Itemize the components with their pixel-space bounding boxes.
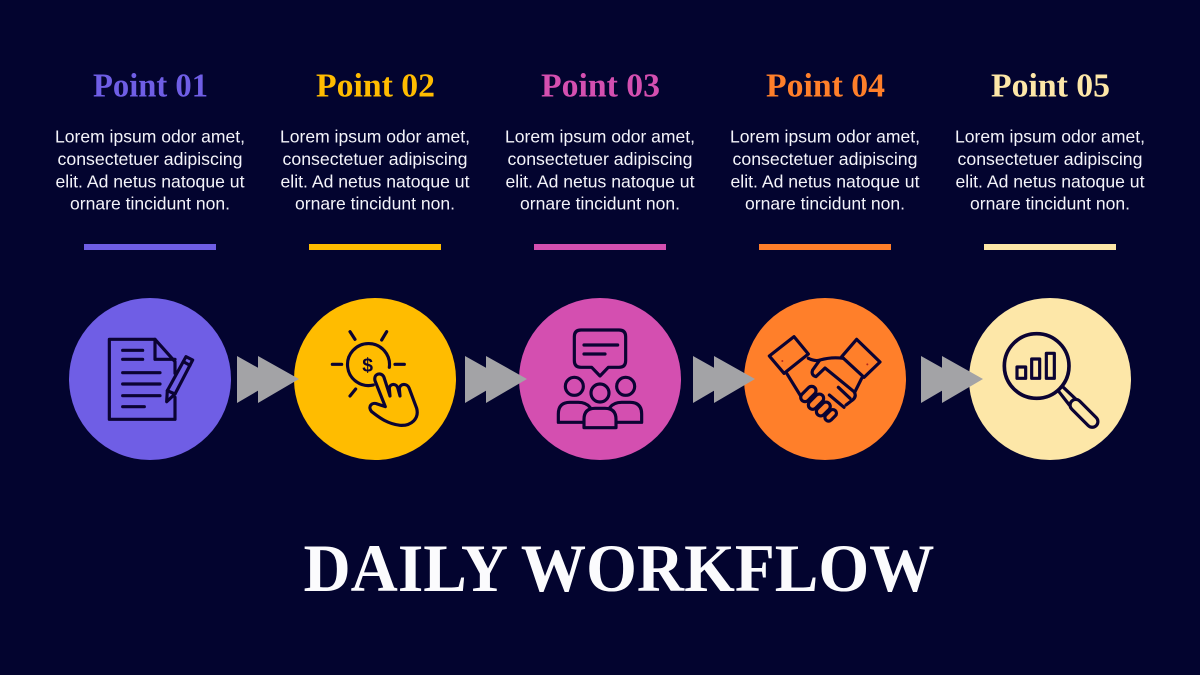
- text block: Point 03 description: consectetuer adipiscing: [508, 149, 692, 169]
- icon: hand clicking dollar coin: [332, 332, 417, 425]
- text block: Point 05 description: elit. Ad netus natoque ut: [956, 172, 1145, 192]
- heading: Point 05: Point 05: [991, 68, 1110, 104]
- circle: Point 05: [969, 298, 1131, 460]
- text block: Point 03 description: elit. Ad netus natoque ut: [506, 172, 695, 192]
- arrow: Point 01 to 02: [237, 356, 299, 403]
- text block: Point 04 description: ornare tincidunt non.: [745, 194, 905, 214]
- text block: Point 01 description: ornare tincidunt non.: [70, 194, 230, 214]
- icon: handshake: [769, 337, 880, 423]
- arrow: Point 02 to 03: [465, 356, 527, 403]
- underline bar: Point 02: [309, 244, 441, 250]
- arrow: Point 03 to 04: [693, 356, 755, 403]
- column: Point 05: [955, 68, 1145, 250]
- text block: Point 02 description: ornare tincidunt non.: [295, 194, 455, 214]
- text block: Point 05 description: consectetuer adipiscing: [958, 149, 1142, 169]
- text block: Point 02 description: consectetuer adipiscing: [282, 149, 468, 169]
- text block: Point 04 description: consectetuer adipiscing: [732, 149, 918, 169]
- text block: Point 01 description: elit. Ad netus natoque ut: [56, 172, 245, 192]
- column: Point 01: [55, 68, 245, 250]
- text block: Point 01 description: consectetuer adipiscing: [58, 149, 242, 169]
- text block: Point 05 description: [955, 126, 1145, 214]
- title: DAILY WORKFLOW: [304, 530, 934, 606]
- heading: Point 01: Point 01: [93, 68, 208, 104]
- text block: Point 01 description: [55, 126, 245, 214]
- icon: document and pencil: [109, 339, 193, 419]
- icon: magnifier over bar chart: [1004, 334, 1100, 430]
- text block: Point 04 description: [730, 126, 920, 214]
- text block: Point 03 description: Lorem ipsum odor amet,: [505, 126, 695, 146]
- text block: Point 04 description: elit. Ad netus natoque ut: [730, 172, 920, 192]
- text block: Point 05 description: ornare tincidunt non.: [970, 194, 1130, 214]
- heading: Point 03: Point 03: [541, 68, 660, 104]
- text block: Point 04 description: Lorem ipsum odor amet,: [730, 126, 920, 146]
- text block: Point 05 description: Lorem ipsum odor amet,: [955, 126, 1145, 146]
- underline bar: Point 03: [534, 244, 666, 250]
- icon: hand clicking dollar coin: $: [362, 355, 373, 376]
- heading: Point 02: Point 02: [316, 68, 435, 104]
- text block: Point 02 description: Lorem ipsum odor amet,: [280, 126, 470, 146]
- arrow: Point 04 to 05: [921, 356, 983, 403]
- column: Point 03: [505, 68, 695, 250]
- underline bar: Point 01: [84, 244, 216, 250]
- text block: Point 01 description: Lorem ipsum odor amet,: [55, 126, 245, 146]
- circle: Point 02: [294, 298, 456, 460]
- heading: Point 04: Point 04: [766, 68, 885, 104]
- text block: Point 03 description: ornare tincidunt non.: [520, 194, 680, 214]
- text block: Point 02 description: [280, 126, 470, 214]
- text block: Point 02 description: elit. Ad netus natoque ut: [280, 172, 470, 192]
- circle: Point 03: [519, 298, 681, 460]
- text block: Point 03 description: [505, 126, 695, 214]
- circle: Point 04: [744, 298, 906, 460]
- column: Point 02: [280, 68, 470, 250]
- column: Point 04: [730, 68, 920, 250]
- underline bar: Point 04: [759, 244, 891, 250]
- circle: Point 01: [69, 298, 231, 460]
- underline bar: Point 05: [984, 244, 1116, 250]
- icon: team with speech bubble: [558, 330, 642, 428]
